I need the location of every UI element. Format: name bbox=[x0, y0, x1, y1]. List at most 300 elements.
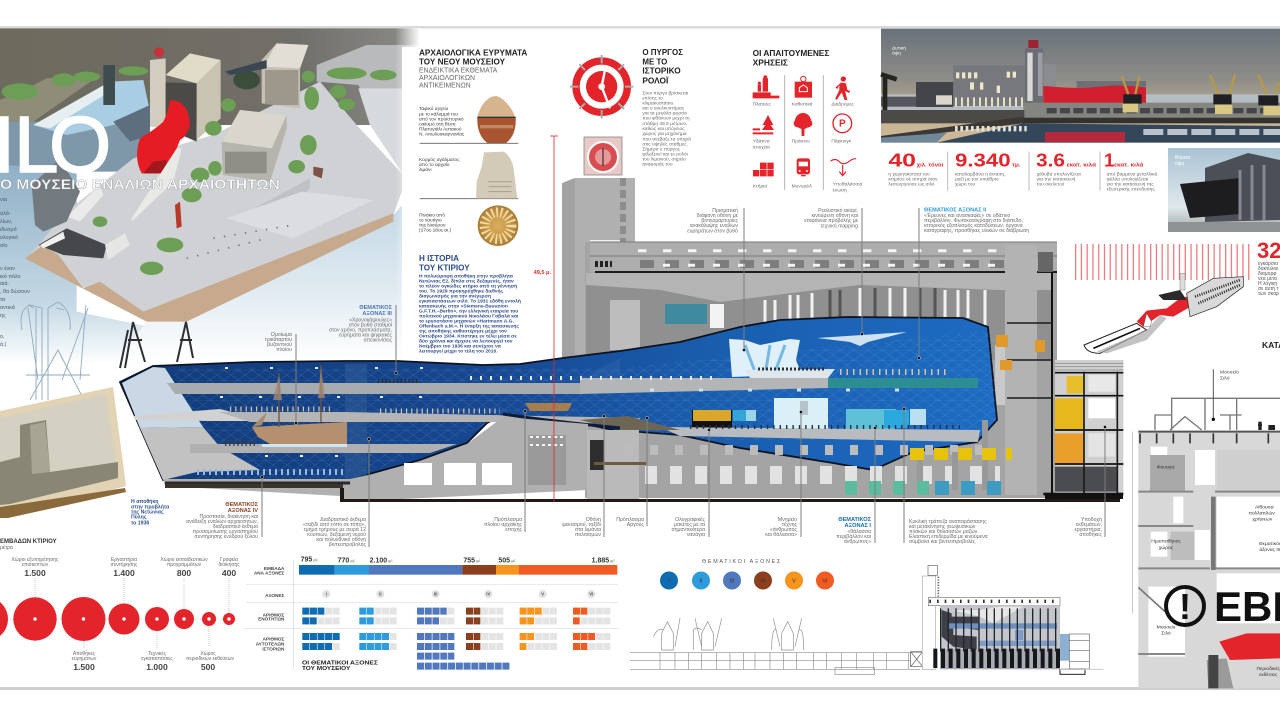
side buildings bbox=[262, 43, 308, 108]
area values: 2.100 m² bbox=[370, 557, 393, 564]
figure: 32 ribs: διαμορφ bbox=[1258, 271, 1277, 277]
figure: 32 ribs: δακτύλιοι bbox=[1258, 265, 1278, 272]
figure: 40 thousand tons: χιλ. τόνοι bbox=[917, 163, 944, 169]
legend: thematic axes: I bbox=[668, 578, 670, 584]
heading: ΑΝΤΙΚΕΙΜΕΝΩΝ bbox=[419, 81, 471, 90]
callout: realistic shark: Ρεαλιστικό ακαρί, bbox=[818, 207, 858, 214]
long section of the silo, right edge: χώρος bbox=[1159, 545, 1174, 551]
legend: thematic axes bbox=[660, 559, 834, 590]
long section of the silo, right edge: Σιλό bbox=[1161, 630, 1171, 637]
figure: 32 ribs: σε αυτή τ bbox=[1258, 285, 1278, 292]
axis V squares bbox=[520, 611, 542, 646]
chart: building areas bubbles: 500 bbox=[201, 662, 215, 672]
callout: holographic models bbox=[671, 516, 705, 538]
small galley bbox=[525, 403, 572, 411]
labels above: περιοδικών εκθέσεων bbox=[186, 655, 234, 662]
lower concrete base bbox=[163, 417, 1123, 502]
axis numerals: I bbox=[326, 592, 327, 597]
stripes above the hull bbox=[765, 288, 985, 325]
heading bbox=[419, 48, 527, 90]
left part darker galleries bbox=[345, 364, 367, 482]
tower bbox=[562, 178, 635, 362]
axis III squares bbox=[417, 611, 510, 666]
callout: interactive exhibit: κουπιών, δεξαμενή νερού bbox=[307, 531, 366, 538]
item: burial vessel: Πλατυγιάλι Αστακού bbox=[419, 125, 462, 132]
labels: Υποθαλάσσια bbox=[833, 180, 862, 187]
text block: του λιμανιού, σημείο bbox=[642, 156, 686, 163]
area values: 795 m² bbox=[301, 557, 318, 564]
icon: monorail bbox=[797, 158, 810, 176]
square rigged museum ship bbox=[252, 365, 347, 447]
panel: building history: πολιτικού μηχανικού Νικολάου Γαβαλά και bbox=[419, 314, 519, 320]
labels above: προγραμμάτων bbox=[167, 561, 202, 568]
callout: trireme model bbox=[265, 332, 292, 353]
callout: holographic models: ναυάγια bbox=[687, 531, 705, 538]
callout: thematic axis II: ιστορικός εξοπλισμός καταδύσεων, όργανα bbox=[924, 222, 1023, 229]
labels: ένωση bbox=[833, 187, 847, 194]
panel: tower and historic clock bbox=[570, 47, 691, 168]
labels: Διαδρομές bbox=[831, 101, 854, 108]
callout: thematic axis IV bbox=[186, 502, 259, 540]
callout: holographic models: σημαντικότερα bbox=[671, 526, 705, 533]
title bbox=[0, 100, 280, 192]
empty squares bbox=[302, 611, 610, 646]
intro text, clipped at page edge: αντικά bbox=[0, 304, 15, 311]
row labels: ΑΡΙΘΜΟΣ bbox=[263, 637, 285, 642]
area values: 1.885 m² bbox=[592, 557, 615, 564]
labels above: Αποθήκες bbox=[73, 650, 96, 657]
callout: thematic axis IV: προσομοίωσης εργαστηρίου bbox=[193, 529, 258, 535]
callout: prismatic screen: ευρημάτων στον βυθό bbox=[687, 228, 738, 234]
nose glass and concrete bbox=[122, 367, 203, 428]
photo: north elevation bbox=[1168, 148, 1280, 232]
item: shipwreck plate: Πινάκιο από bbox=[419, 211, 445, 218]
intro text, clipped at page edge: αιά. bbox=[0, 280, 9, 287]
icon: walking person bbox=[835, 76, 850, 100]
callout: thematic axis II: περιβάλλον. Φωτοκαταγραφή στο διάπεδο, bbox=[924, 217, 1023, 224]
callout: thematic axis IV: ανάδειξη εναλίων αρχαιοτήτων, bbox=[186, 518, 258, 525]
axis II squares bbox=[359, 611, 389, 646]
figure: 40 thousand tons: η χωρητικότητα του bbox=[888, 170, 930, 177]
labels above: διοίκησης bbox=[218, 562, 240, 568]
callout lines with anchor dots bbox=[260, 208, 1107, 547]
cranes bbox=[1122, 74, 1279, 96]
heading: ΑΡΧΑΙΟΛΟΓΙΚΑ ΕΥΡΥΜΑΤΑ bbox=[419, 48, 527, 58]
long section of the silo, right edge: Φουαγιέ bbox=[1157, 464, 1176, 471]
item: burial vessel bbox=[419, 96, 518, 143]
long section of the silo, right edge: Μουσείο bbox=[1157, 625, 1176, 631]
text block: και ο ανελκυστήρας bbox=[642, 105, 685, 112]
panel: building history bbox=[419, 253, 521, 355]
chart: building areas bubbles bbox=[0, 539, 240, 672]
callout: Argo model: Αργούς bbox=[627, 522, 644, 528]
photo: west elevation at dusk: Δυτική bbox=[892, 44, 906, 51]
callout: art monument: και θάλασσα» bbox=[765, 531, 797, 538]
callout: holographic models: μακέτες με τα bbox=[674, 521, 705, 528]
panel: building history: ΤΟΥ ΚΤΙΡΙΟΥ bbox=[419, 262, 470, 272]
panel: building history: διαγωνισμός για την ανέγερση bbox=[419, 294, 491, 300]
heading: ΕΜΒΑΔΩΝ ΚΤΙΡΙΟΥ bbox=[0, 539, 57, 545]
callout: interactive exhibit: τμήμα τρήρους με σειρά 12 bbox=[304, 526, 366, 533]
axis numerals: III bbox=[434, 592, 437, 597]
figure: 1 million kilos: 1 bbox=[1104, 150, 1114, 171]
callout: trireme model: βυζαντινού bbox=[267, 342, 292, 348]
axis numerals: V bbox=[541, 592, 544, 597]
panel: required uses bbox=[753, 48, 862, 194]
legend: thematic axes: V bbox=[792, 578, 796, 584]
callout: prismatic screen: Πρισματική bbox=[712, 207, 738, 214]
callout: circular table: σύμβολα και βιντεοπροβολές bbox=[909, 538, 976, 545]
icon: tree bbox=[794, 113, 812, 136]
callout: circular table: Κυκλική τράπεζα αναπαράστασης bbox=[909, 518, 987, 525]
icon: seating bbox=[795, 76, 812, 98]
blue museum hull bbox=[120, 317, 997, 482]
callout: reception of exhibits bbox=[1074, 516, 1102, 538]
labels above: ευρημάτων bbox=[72, 655, 97, 662]
icon: squares bbox=[753, 75, 779, 98]
callout: prismatic screen bbox=[687, 207, 739, 234]
long section of the silo, right edge: Σιλό bbox=[1220, 375, 1230, 382]
caption: vintage photo: Πύλης bbox=[131, 514, 147, 520]
text block: για τα μεγάλα φορτία bbox=[642, 110, 687, 117]
callout: thematic axis I: περιβάλλον και bbox=[836, 533, 871, 540]
panel: building history: Offenbach a.M.». Η έναρξη της κατασκευής bbox=[419, 324, 519, 330]
row labels: ΕΝΟΤΗΤΩΝ bbox=[258, 617, 285, 622]
callout: reception of exhibits: αποθήκες bbox=[1079, 531, 1102, 538]
callout: circular table: Ελαστική επιδερμίδα με κινούμενα bbox=[909, 533, 988, 540]
chart: building areas bubbles: 1.500 bbox=[24, 568, 46, 578]
intro text, clipped at page edge: νια bbox=[0, 197, 7, 203]
icon: clock bbox=[570, 55, 633, 118]
intro text, clipped at page edge: λίων, bbox=[0, 219, 13, 225]
legend: thematic axes: VI bbox=[822, 578, 828, 584]
figure: 32 ribs: Η λογική bbox=[1258, 280, 1277, 287]
spotlights bbox=[225, 367, 445, 369]
item: statue torso bbox=[419, 152, 518, 199]
text block: αναφοράς του. bbox=[642, 161, 674, 168]
figure: 1 million kilos: εξωτερικής επένδυσης bbox=[1107, 185, 1155, 192]
labels: Κτήρια bbox=[753, 183, 767, 190]
callout: water screen bbox=[562, 516, 601, 538]
figure: 3.6 million kilos bbox=[1036, 150, 1097, 187]
caption: vintage photo: το 1936 bbox=[131, 520, 149, 526]
lower wave of hull bbox=[503, 414, 620, 428]
row labels: ΙΣΤΟΡΙΩΝ bbox=[262, 646, 285, 651]
callout: thematic axis III: στον βυθό σταθμοί bbox=[349, 322, 393, 328]
caption: vintage photo bbox=[131, 499, 170, 526]
truss rows bbox=[590, 242, 1057, 278]
labels: Υδάτινα bbox=[753, 137, 770, 144]
panel: building history: το εργοστάσιο μηχανών «Hartmann A.G. bbox=[419, 319, 514, 325]
item: shipwreck plate: της Νισύρου bbox=[419, 221, 446, 228]
callout: thematic axis IV: Προστασία, διακίνηση και bbox=[200, 514, 258, 520]
vintage photo of the silo bbox=[0, 387, 126, 518]
text block: επίσης το bbox=[642, 95, 663, 101]
labels: Πλατείες bbox=[753, 102, 772, 108]
harbour cranes by the nose bbox=[120, 322, 193, 368]
area values: 755 m² bbox=[463, 557, 481, 564]
callout: water screen: ψεκασμού, ταξίδι bbox=[562, 522, 601, 528]
callout: thematic axis III: στον χρόνο, προπλάσματα, bbox=[329, 326, 392, 334]
columns and windows below hull bbox=[645, 466, 1000, 484]
red museum volume bbox=[137, 100, 190, 173]
text block: που φθάνουν μέχρι τη bbox=[642, 115, 690, 122]
item: shipwreck plate: το ναυάγιο bbox=[419, 216, 442, 223]
clock on tower bbox=[584, 137, 622, 175]
labels: Πράσινο bbox=[792, 137, 810, 144]
callout: thematic axis II: «Έρευνες και ανασκαφές» σε υδάτινο bbox=[924, 212, 1010, 219]
heading bbox=[642, 47, 683, 85]
figure: 40 thousand tons: κτηρίου σε σιτηρά όταν bbox=[888, 175, 938, 182]
callout: interactive exhibit: Διαδραστικό έκθεμα bbox=[320, 516, 366, 523]
callout: thematic axis II bbox=[924, 208, 1029, 234]
long section of the silo, right edge: εκθέσεις bbox=[1259, 671, 1278, 678]
text block: καθώς και υπόγειος bbox=[642, 125, 685, 132]
table: thematic axes bbox=[243, 557, 618, 672]
callout: prismatic screen: διάφανη οθόνη με bbox=[697, 212, 739, 219]
aerial view of the museum site bbox=[0, 28, 420, 365]
red stripes rhythm bbox=[1075, 244, 1253, 280]
panel: building history: εγκαταστάσεων σιλό. Το 1931 εδόθη εντολή bbox=[419, 299, 521, 305]
callout: thematic axis II: καταγραφής, προσθήκες υλικών σε διάβρωση bbox=[924, 227, 1029, 234]
long section of the silo, right edge: χρήσεων bbox=[1252, 515, 1273, 522]
figure: 32 ribs: εγκάρσια bbox=[1258, 260, 1278, 267]
long section of the silo, right edge: άξονας ΙΙΙ bbox=[1259, 546, 1280, 553]
heading bbox=[0, 539, 57, 551]
labels above: Χώρος bbox=[200, 650, 216, 657]
chart: building areas bubbles: 1.500 bbox=[73, 662, 95, 672]
main building shell cross-section bbox=[562, 137, 1057, 498]
item: statue torso: από το αρχαίο bbox=[419, 161, 450, 168]
heading: ΕΝΔΕΙΚΤΙΚΑ ΕΚΘΕΜΑΤΑ bbox=[419, 65, 497, 74]
figure: 1 million kilos: εκατ. κιλά bbox=[1114, 163, 1144, 169]
callout: Argo model: Πρόπλασμα bbox=[616, 516, 644, 523]
icon: parking bbox=[833, 114, 852, 133]
key figures bbox=[888, 150, 1157, 192]
text block: κλιμακοστάσιο bbox=[642, 99, 674, 106]
figure: 32 ribs: των σκαρ bbox=[1258, 291, 1279, 297]
axis I squares bbox=[302, 611, 340, 646]
bright lower gallery bbox=[774, 398, 828, 430]
row labels: ΑΡΙΘΜΟΣ bbox=[263, 612, 285, 617]
icon: water elements bbox=[753, 115, 774, 134]
labels: Μονορέιλ bbox=[792, 183, 812, 190]
heading: ΧΡΗΣΕΙΣ bbox=[753, 58, 788, 68]
tower and silo building bbox=[150, 58, 166, 128]
figure: 40 thousand tons: 40 bbox=[888, 150, 916, 171]
callout: interactive exhibit: «ταξίδι από τόπο σε τόπο», bbox=[303, 521, 366, 528]
panel: building history: Νοέμβριο του 1936 και συνέχισε να bbox=[419, 344, 501, 350]
iceberg screen bbox=[729, 339, 802, 378]
table heading: ΤΟΥ ΜΟΥΣΕΙΟΥ bbox=[302, 666, 351, 672]
roof structure bbox=[1155, 398, 1280, 430]
panel: building history: λειτουργεί μέχρι το τέλη του 2010. bbox=[419, 349, 498, 355]
photo: north elevation: όψη bbox=[1175, 160, 1184, 167]
labels above: επισκεπτών bbox=[22, 561, 49, 568]
long section of the silo, right edge: πολλαπλών bbox=[1249, 510, 1275, 516]
upper ship on the deck bbox=[745, 369, 835, 378]
callout: realistic shark: επιφάνεια προβολής με bbox=[804, 217, 859, 224]
labels above: Χώροι εκπαιδευτικών bbox=[160, 556, 208, 563]
panel: building history: Η ΙΣΤΟΡΙΑ bbox=[419, 253, 459, 263]
axis IV squares bbox=[466, 611, 480, 646]
intro text, clipped at page edge: αλά- bbox=[0, 210, 11, 217]
axis numerals: II bbox=[379, 592, 382, 597]
chart: building areas bubbles: 800 bbox=[177, 568, 191, 578]
callout: realistic shark: κινούμενη οθόνη και bbox=[811, 212, 858, 219]
chart: building areas bubbles: 1.400 bbox=[113, 568, 135, 578]
figure: 3.6 million kilos: του σκελετού bbox=[1037, 180, 1065, 187]
text block: στάθμη 49,5 μέτρων, bbox=[642, 120, 687, 127]
labels above: Εργαστήρια bbox=[111, 556, 137, 563]
axis VI squares bbox=[573, 611, 595, 646]
long section of the silo, right edge bbox=[1133, 369, 1280, 688]
callout: trireme model: τρικάταρτου bbox=[265, 336, 292, 343]
panel: building history: του. Το 1929 προκηρύχθηκε διεθνής bbox=[419, 289, 504, 295]
labels: Καθιστικά bbox=[792, 101, 813, 108]
callout: thematic axis III bbox=[329, 305, 393, 344]
item: statue torso: Κορμός αγάλματος bbox=[419, 156, 460, 163]
callout: circular table: και μετακίνησης γεωφυσικών bbox=[909, 524, 976, 530]
intro text, clipped at page edge: σίο bbox=[0, 243, 8, 249]
callout: thematic axis II: ΘΕΜΑΤΙΚΟΣ ΑΞΟΝΑΣ II bbox=[924, 208, 987, 214]
labels above: συντήρησης bbox=[111, 561, 138, 568]
callout: interactive exhibit: βιντεοπροβολής bbox=[329, 541, 366, 548]
intro text, clipped at page edge: ικό πόλο bbox=[0, 273, 21, 280]
text block: Σήμερα ο πύργος bbox=[642, 145, 681, 152]
callout: interactive exhibit: και πολυεθνικό οθόνη bbox=[316, 536, 366, 543]
row labels: ΑΝΑ ΑΞΟΝΕΣ bbox=[254, 571, 285, 576]
panel: building history: το πλέον ογκώδες κτήριο από τη γέννησή bbox=[419, 284, 517, 290]
callout: water screen: στα λιμάνια bbox=[575, 526, 601, 533]
figure: 40 thousand tons bbox=[888, 150, 944, 187]
item: burial vessel: από τον προϊστορικό bbox=[419, 115, 464, 122]
panel: building history: δύο χρόνια και άρχισε να λειτουργεί τον bbox=[419, 339, 513, 345]
axis numerals: IV bbox=[486, 592, 490, 597]
callout: holographic models: Ολογραφικές bbox=[675, 516, 705, 523]
caption: vintage photo: Η αποθήκη bbox=[131, 499, 158, 505]
axis numerals: VI bbox=[589, 592, 593, 597]
callout: thematic axis IV: συντήρησης ενύδρου ξύλου bbox=[194, 533, 258, 540]
callout: thematic axis III: «Χρονοκάψουλες» bbox=[349, 316, 392, 324]
heading bbox=[753, 48, 829, 68]
intro text, clipped at page edge: ης bbox=[0, 313, 6, 319]
icon: crane line drawing bbox=[21, 302, 90, 400]
panel: building history: της αποθήκης καθυστέρησε μέχρι τον bbox=[419, 329, 507, 335]
labels above: εγκαταστάσεις bbox=[141, 655, 173, 662]
callout: trireme model: πλοίου bbox=[276, 347, 292, 353]
callout: archaic ship model bbox=[484, 516, 522, 533]
figure: 32 ribs: νέα μετα bbox=[1258, 275, 1277, 282]
callout: thematic axis I: ΑΞΟΝΑΣ Ι bbox=[844, 523, 871, 529]
text block: στις υψηλές στάθμες. bbox=[642, 140, 688, 147]
callout: Argo model bbox=[616, 516, 644, 528]
area values bbox=[301, 557, 615, 564]
item: burial vessel: οικισμό στη θέση bbox=[419, 120, 456, 127]
long section of the silo, right edge: Ημιυπαίθριος bbox=[1151, 539, 1181, 545]
callout: thematic axis III: ΘΕΜΑΤΙΚΟΣ bbox=[359, 305, 393, 311]
callout: archaic ship model: εποχής bbox=[505, 526, 522, 533]
labels above: Τεχνικές bbox=[148, 650, 167, 657]
figure: 3.6 million kilos: για την κατασκευή bbox=[1037, 175, 1076, 182]
ships and cranes on the left bbox=[32, 162, 80, 232]
labels above: Χώροι εξυπηρέτησης bbox=[12, 556, 59, 563]
figure: 1 million kilos: φύλλα υπολογίζεται bbox=[1107, 175, 1148, 182]
axis numerals bbox=[326, 592, 593, 597]
photo: north elevation: Βόρεια bbox=[1175, 154, 1190, 161]
item: burial vessel: Ν. Αιτωλοακαρνανίας bbox=[419, 132, 465, 138]
chart: building areas bubbles: 1.000 bbox=[146, 662, 168, 672]
long section of the silo, right edge: Περιοδικές bbox=[1257, 665, 1280, 672]
callout: prismatic screen: βιντεομαρτυρίες bbox=[701, 218, 738, 224]
text block bbox=[642, 89, 691, 168]
figure: 9340 square metres: χώρο του bbox=[955, 180, 975, 187]
row labels: ΑΥΤΟΤΕΛΩΝ bbox=[256, 641, 285, 646]
callout: thematic axis IV: διαδραστικό έκθεμα bbox=[213, 523, 258, 530]
trees bbox=[2, 66, 397, 275]
visitors rows bbox=[378, 379, 420, 383]
callout: thematic axis I: άνθρωπος» bbox=[844, 538, 871, 545]
callout: thematic axis I: ΘΕΜΑΤΙΚΟΣ bbox=[838, 517, 872, 523]
heading: ΤΟΥ ΝΕΟΥ ΜΟΥΣΕΙΟΥ bbox=[419, 56, 505, 66]
callout: circular table bbox=[909, 518, 988, 545]
labels: Πάρκινγκ bbox=[831, 137, 852, 144]
intro text, clipped at page edge: ιδυσμό bbox=[0, 226, 17, 233]
callout: circular table: πλακών και θαλασσών μαζών. bbox=[909, 529, 979, 535]
intro text, clipped at page edge: ά.) bbox=[0, 341, 7, 348]
callout: thematic axis III: ευρήματα και ψηφιακές bbox=[339, 332, 392, 338]
intro text, clipped at page edge: τα bbox=[0, 297, 5, 303]
figure: 3.6 million kilos: χάλυβα υπολογίζεται bbox=[1037, 170, 1081, 177]
figure: 9340 square metres: καταλαμβάνει η έκταση, bbox=[955, 170, 1005, 177]
icon: buildings bbox=[753, 163, 774, 176]
callout: art monument: «άνθρωπος bbox=[770, 526, 797, 533]
labels bbox=[753, 101, 862, 194]
heading: ΜΕ ΤΟ bbox=[642, 56, 668, 66]
panel: building history: G.F.T.H.–Berlin», την ελληνική εταιρεία του bbox=[419, 309, 518, 315]
icon: parking: P bbox=[839, 119, 846, 130]
figure: 40 thousand tons: λειτουργούσε ως σιλό bbox=[888, 180, 935, 187]
callout: reception of exhibits: εκθεμάτων, bbox=[1076, 521, 1102, 528]
pier and cranes bbox=[630, 618, 923, 675]
callout: reception of exhibits: εργαστήρια, bbox=[1074, 526, 1102, 533]
callout: thematic axis I bbox=[836, 517, 872, 545]
logo: EBF: ! bbox=[1179, 586, 1191, 627]
table heading bbox=[302, 660, 379, 672]
long section of the silo, right edge: Μουσείο bbox=[1220, 370, 1239, 376]
text block: φιλοξενεί και το ρολόι bbox=[642, 150, 688, 157]
text block: που ανέβαζε τα σιτηρά bbox=[642, 135, 691, 142]
intro text, clipped at page edge: , θα δώσουν bbox=[0, 289, 30, 295]
stacked area bar bbox=[299, 565, 617, 575]
callout: art monument bbox=[765, 517, 797, 538]
callout: archaic ship model: πλοίου αρχαϊκής bbox=[484, 521, 522, 528]
callout: archaic ship model: Πρόπλασμα bbox=[494, 516, 522, 523]
figure: 9340 square metres bbox=[955, 150, 1021, 187]
figure: 1 million kilos bbox=[1104, 150, 1157, 192]
figure: 9340 square metres: μαζί με τον υπαίθριο bbox=[955, 176, 999, 182]
row labels: ΑΞΟΝΕΣ bbox=[265, 593, 285, 598]
axonometric sketch of the museum bbox=[1084, 273, 1243, 353]
figure: 3.6 million kilos: εκατ. κιλά bbox=[1067, 163, 1097, 169]
intro text, clipped at page edge: ολογικό bbox=[0, 234, 18, 241]
legend: thematic axes: ΘΕΜΑΤΙΚΟΙ ΑΞΟΝΕΣ bbox=[702, 559, 782, 565]
item: statue torso: λιμάνι bbox=[419, 166, 432, 173]
item: shipwreck plate bbox=[419, 205, 518, 246]
callout: interactive exhibit bbox=[303, 516, 366, 548]
height measure of the tower: 49,5 μ. bbox=[534, 270, 551, 276]
callout: thematic axis IV: ΑΞΟΝΑΣ IV bbox=[228, 508, 258, 514]
